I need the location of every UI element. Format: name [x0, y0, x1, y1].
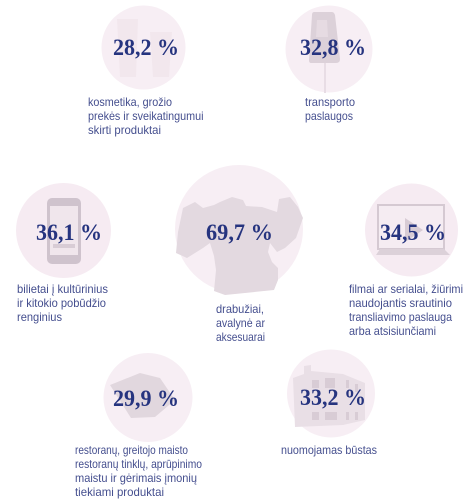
label: films: transliavimo paslauga [349, 310, 452, 324]
item: cosmetics [88, 6, 204, 137]
label: tickets: ir kitokio pobūdžio [17, 296, 106, 310]
circle: transport [286, 6, 372, 92]
item: films [349, 184, 463, 338]
label: rental housing: nuomojamas būstas [281, 443, 377, 457]
item: clothing [175, 165, 303, 344]
value: 32,8 %: 32,8 % [300, 35, 366, 60]
value: 28,2 %: 28,2 % [113, 35, 179, 60]
value: 36,1 %: 36,1 % [36, 220, 102, 245]
label: clothing: drabužiai, [216, 302, 264, 316]
value: 33,2 %: 33,2 % [300, 385, 366, 410]
icon: apartment building [293, 365, 365, 427]
icon: phone on pole [309, 12, 340, 93]
label: restaurants: tiekiami produktai [75, 485, 164, 499]
value: 69,7 %: 69,7 % [206, 220, 273, 245]
circle: rental housing [287, 350, 375, 438]
item: tickets [16, 183, 111, 324]
label: films: naudojantis srautinio [349, 296, 452, 310]
item: restaurants [75, 353, 202, 499]
label: clothing: aksesuarai [216, 330, 265, 344]
label: cosmetics: kosmetika, grožio [88, 95, 172, 109]
label: transport: transporto [305, 95, 355, 109]
label: tickets: renginius [17, 310, 62, 324]
circle: restaurants [104, 353, 192, 442]
icon: smartphone [47, 198, 81, 264]
value: 29,9 %: 29,9 % [113, 386, 179, 411]
label: restaurants: restoranų tinklų, aprūpinimo [75, 457, 202, 471]
label: restaurants: restoranų, greitojo maisto [75, 443, 188, 457]
label: restaurants: maistu ir gėrimais įmonių [75, 471, 197, 485]
label: tickets: bilietai į kultūrinius [17, 282, 108, 296]
icon: laptop with play button [376, 205, 450, 255]
label: clothing: avalynė ar [216, 316, 265, 330]
icon: cosmetic tubes [117, 19, 172, 77]
circle: cosmetics [102, 6, 186, 90]
circle: films [365, 184, 458, 276]
label: films: filmai ar serialai, žiūrimi [349, 282, 463, 296]
icon: sweater [176, 197, 303, 295]
item: rental housing [281, 350, 377, 457]
label: films: arba atsisiunčiami [349, 324, 436, 338]
label: transport: paslaugos [305, 109, 353, 123]
circle: clothing [175, 165, 303, 293]
item: transport [286, 6, 372, 123]
label: cosmetics: skirti produktai [88, 123, 161, 137]
circle: tickets [16, 183, 111, 278]
value: 34,5 %: 34,5 % [380, 220, 446, 245]
label: cosmetics: prekės ir sveikatingumui [88, 109, 204, 123]
icon: food box [110, 373, 175, 418]
